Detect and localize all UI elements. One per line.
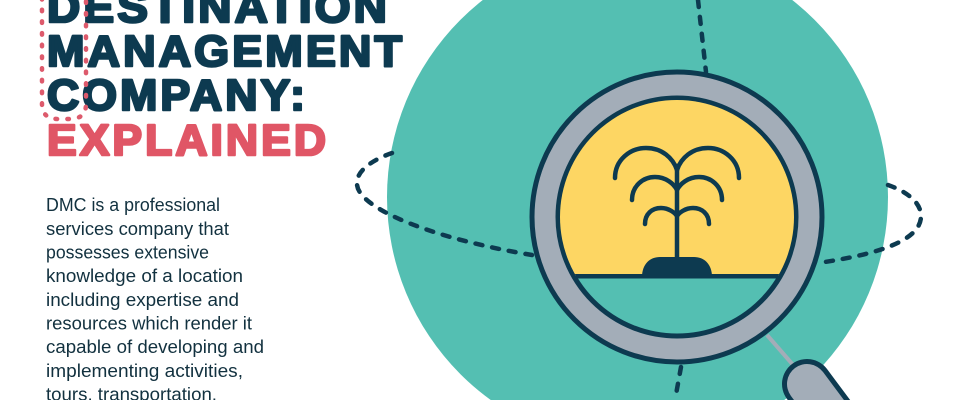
description text: knowledge of a location xyxy=(46,266,243,286)
handle xyxy=(807,384,860,400)
description text: possesses extensive xyxy=(46,242,209,262)
title line: explained: EXPLAINED xyxy=(47,116,329,165)
lens scene xyxy=(560,100,794,278)
dotted highlight around letter D, M, C xyxy=(42,0,86,119)
dashed orbit: horizontal xyxy=(357,0,921,400)
description text: services company that xyxy=(46,219,229,239)
description text: DMC is a professional xyxy=(46,195,220,215)
description text: resources which render it xyxy=(46,314,252,334)
horizon xyxy=(575,274,779,278)
title line: management: MANAGEMENT xyxy=(47,27,405,76)
teal background circle xyxy=(387,0,888,400)
description text: capable of developing and xyxy=(46,337,264,357)
title xyxy=(47,0,405,165)
yellow sky xyxy=(560,100,794,276)
magnifying glass xyxy=(532,72,860,400)
description text: including expertise and xyxy=(46,290,239,310)
title line: company: COMPANY: xyxy=(47,71,308,120)
connector xyxy=(767,335,794,366)
mound xyxy=(642,257,712,277)
description text xyxy=(46,195,264,400)
icon: fountain xyxy=(615,148,739,277)
description text: implementing activities, xyxy=(46,361,243,381)
lens ring xyxy=(544,84,810,350)
